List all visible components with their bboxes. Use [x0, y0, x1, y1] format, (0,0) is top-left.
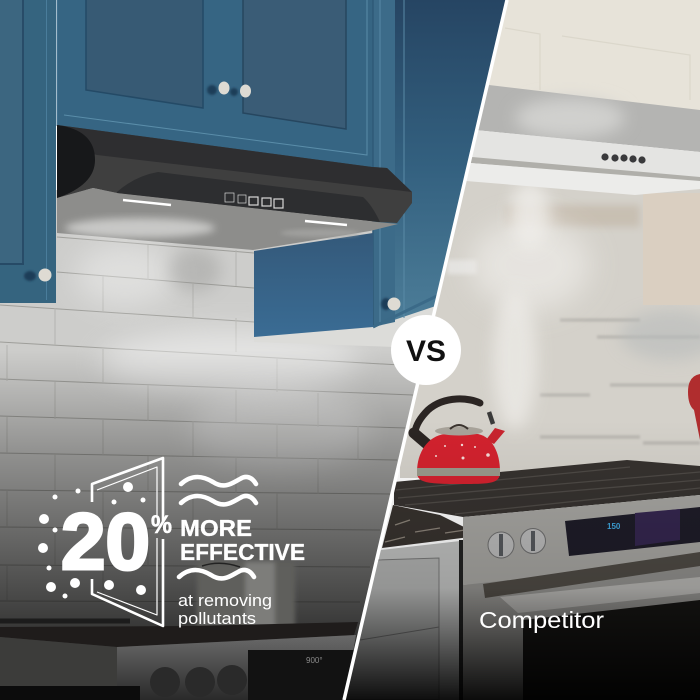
oven dark window — [523, 600, 700, 700]
kettle speckles — [435, 444, 490, 460]
competitor label: Competitor — [479, 607, 604, 633]
counter top — [0, 622, 358, 647]
light bars — [123, 200, 347, 225]
granite flecks — [385, 520, 465, 542]
20 figure: 20 — [61, 497, 150, 586]
display digits: 150 — [607, 522, 621, 531]
divider line — [344, 0, 507, 700]
icon: door frame — [92, 458, 163, 626]
beige side cabinet — [643, 193, 700, 305]
competitor hood smoke patch — [515, 98, 625, 138]
control panel strip — [117, 172, 380, 222]
hood underside — [57, 188, 398, 250]
icon: pollutant particles — [38, 482, 146, 598]
more effective heading: EFFECTIVE — [180, 539, 305, 565]
bottom dark gradient — [340, 420, 700, 700]
lower cabinet side — [254, 233, 373, 337]
upper center cabinet — [57, 0, 373, 168]
panel: right photo with competitor hood — [340, 0, 700, 700]
back burner grates — [0, 618, 130, 624]
stove knobs — [150, 667, 180, 692]
stove front — [117, 635, 356, 700]
hood end cap — [57, 125, 95, 198]
black range hood — [57, 125, 412, 250]
range control display — [565, 507, 700, 556]
touch buttons — [225, 193, 283, 208]
VS badge — [391, 315, 461, 385]
cream upper cabinets — [489, 0, 700, 110]
competitor hood front — [472, 130, 700, 178]
tiled wall — [0, 190, 416, 650]
oven door handle — [500, 577, 700, 613]
knobs — [601, 153, 646, 164]
subheading: at removing — [178, 592, 272, 610]
bottom dark gradient — [0, 363, 416, 650]
hood top band — [57, 125, 412, 192]
stove display — [248, 650, 354, 700]
red pot at right edge — [688, 374, 700, 440]
stainless pot — [197, 562, 295, 628]
competitor hood underside — [466, 163, 700, 195]
oven knobs — [488, 532, 514, 558]
icon: airflow wave bottom — [179, 570, 254, 578]
competitor hood trim — [470, 157, 700, 182]
left cabinet door — [0, 0, 56, 303]
badge: 20% more effective — [38, 458, 305, 628]
lower white cabinet — [340, 540, 464, 700]
hood body — [57, 125, 412, 223]
percent sign: % — [151, 511, 172, 539]
subheading — [178, 592, 272, 628]
red kettle — [414, 399, 505, 484]
subheading: pollutants — [178, 610, 256, 628]
stove grates — [394, 460, 700, 517]
stove display: 900° — [306, 656, 323, 665]
left cabinet below counter — [0, 637, 117, 686]
dark countertop and stove — [0, 621, 358, 700]
more effective heading — [180, 515, 305, 565]
granite countertop — [382, 505, 470, 548]
VS badge: VS — [406, 335, 446, 368]
cabinet underside edge — [319, 307, 434, 347]
right cabinet column — [373, 0, 513, 327]
icon: airflow waves top — [181, 477, 256, 504]
range body — [463, 495, 700, 700]
backsplash — [400, 178, 700, 478]
more effective heading: MORE — [180, 515, 252, 541]
competitor hood grey band — [475, 85, 700, 152]
smoke cloud — [75, 243, 370, 472]
panel: left photo with black range hood — [0, 0, 513, 700]
